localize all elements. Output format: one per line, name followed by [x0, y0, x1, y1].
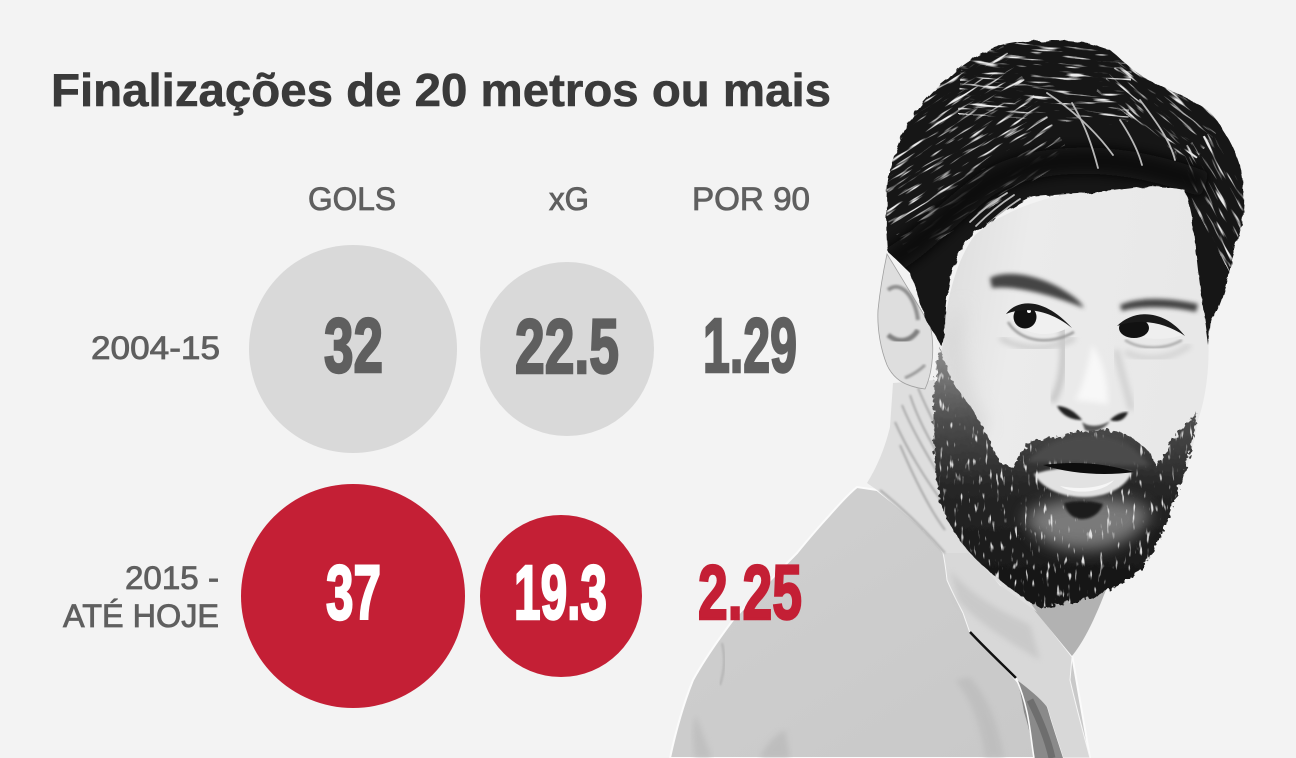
- column headers: GOLS: [308, 181, 396, 217]
- bubble: xG 2004-15: [480, 262, 654, 436]
- collar band: [923, 530, 1090, 758]
- row label: 2004-15: 2004-15: [91, 330, 220, 366]
- row label: 2015 - até hoje: 2015 -: [125, 560, 219, 596]
- column headers: xG: [549, 181, 589, 217]
- column headers: [308, 181, 810, 217]
- nose: [1057, 406, 1128, 432]
- ear: [878, 254, 933, 389]
- row label: 2015 - até hoje: [63, 560, 219, 634]
- right eye: [1117, 314, 1185, 348]
- bubble: xG 2015-hoje: [480, 515, 642, 677]
- bubble: xG 2004-15: 22.5: [515, 304, 619, 390]
- title: Finalizações de 20 metros ou mais: [51, 64, 831, 116]
- shirt: [670, 487, 1090, 758]
- bubble: gols 2015-hoje: 37: [326, 550, 381, 636]
- eyebrows: [990, 274, 1198, 312]
- beard: [925, 345, 1210, 615]
- neck: [867, 380, 1106, 656]
- bubble: gols 2015-hoje: [241, 484, 465, 708]
- column headers: POR 90: [692, 181, 810, 217]
- value: por 90 2004-15: 1.29: [703, 303, 797, 389]
- bubble: xG 2015-hoje: 19.3: [514, 550, 607, 636]
- value: por 90 2015-hoje: 2.25: [698, 550, 802, 636]
- left eye: [1006, 303, 1074, 340]
- hair: [885, 40, 1245, 346]
- bubble: gols 2004-15: 32: [324, 303, 383, 389]
- photo: player portrait: [670, 29, 1282, 758]
- face: [934, 187, 1209, 600]
- lips: [1027, 436, 1150, 519]
- bubble: gols 2004-15: [249, 245, 457, 453]
- row label: 2015 - até hoje: ATÉ HOJE: [63, 598, 219, 634]
